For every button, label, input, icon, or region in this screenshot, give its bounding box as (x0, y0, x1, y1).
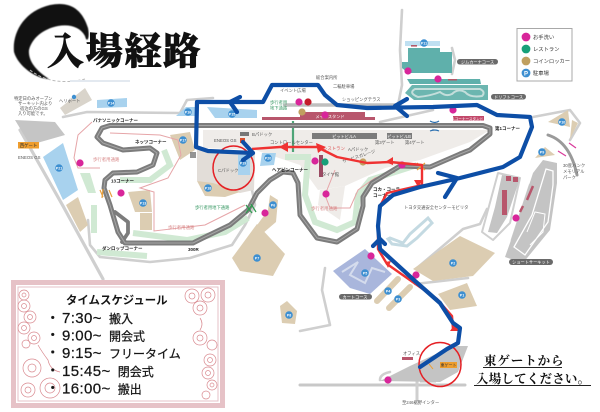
track map labels: パーク (563, 175, 576, 181)
schedule rows: ・ (46, 345, 60, 360)
floral decoration (18, 288, 217, 399)
kart course (333, 249, 392, 300)
west gate area (15, 120, 65, 145)
track map labels: ENEOS GS (214, 138, 237, 143)
track map labels: 第1コーナー (495, 125, 521, 132)
parking marker numbers: P9 (540, 150, 544, 154)
parking marker numbers: P11 (421, 41, 427, 45)
parking marker numbers: P7 (255, 256, 259, 260)
parking marker numbers: P13 (140, 201, 146, 205)
track map labels: 地下通路 (270, 104, 288, 112)
schedule rows: ・ (46, 380, 60, 396)
main stand: メインスタンド (315, 113, 345, 120)
paddock ground (203, 130, 490, 190)
parking marker numbers: P21 (56, 166, 62, 170)
west gate sign (18, 142, 39, 149)
track map labels: コーナー (373, 193, 391, 199)
track map labels: コントロールセンター (270, 139, 313, 146)
track map labels: ENEOS GS (18, 155, 41, 160)
track map labels: 歩行者用地下通路 (195, 204, 230, 211)
main stand (262, 112, 375, 120)
track map labels: 歩行者用 (270, 99, 287, 106)
track map labels: Aパドック (348, 147, 368, 153)
schedule rows: 7:30~ 搬入 (62, 310, 133, 327)
blue route (196, 85, 532, 367)
pit buildings: ピットビルA (332, 133, 356, 139)
parking marker numbers: P14 (108, 101, 114, 105)
track map labels: タイヤ館 (322, 171, 340, 178)
track map labels: オフィス (403, 351, 420, 356)
short circuit and paddock (488, 160, 557, 266)
track map labels: 30度バンク (563, 162, 585, 169)
parking 20 west (43, 143, 78, 200)
schedule panel (11, 280, 225, 408)
title: 入場経路 (47, 21, 202, 75)
parking marker numbers: P2 (451, 261, 455, 265)
track map labels: 第3ゲート (375, 139, 395, 146)
main straight and track (97, 126, 490, 243)
parking marker numbers: P4 (386, 289, 390, 293)
red circle: C paddock (213, 146, 254, 190)
legend: parking (522, 69, 550, 77)
track map labels: ヘリポート (59, 98, 80, 104)
parking marker numbers: P18 (205, 186, 211, 190)
red route (252, 142, 459, 331)
parking marker numbers: P17 (180, 138, 186, 142)
infield green (94, 150, 417, 256)
schedule rows: ・ (46, 328, 60, 342)
kart course: カートコース (343, 294, 367, 300)
schedule rows: 15:45~ 閉会式 (62, 363, 154, 380)
parking marker numbers: P5 (363, 271, 367, 275)
legend: parking: 駐車場 (533, 69, 550, 77)
east gate instruction (474, 351, 591, 387)
track map labels: 宿泊の方のGS (20, 105, 48, 112)
coin locker markers (298, 108, 367, 166)
west gate sign: 西ゲート (20, 142, 37, 149)
schedule rows: ・ (46, 310, 60, 326)
pit buildings: ピットビルB (387, 133, 411, 139)
parking marker numbers: P6 (271, 203, 275, 207)
track map labels: 入り可能です。 (18, 110, 48, 117)
pink restroom markers (76, 67, 520, 384)
corner stand: 1コーナースタンド (453, 116, 484, 121)
brush circle behind title (14, 4, 130, 82)
parking marker numbers: P10 (559, 120, 565, 124)
schedule rows: 9:00~ 開会式 (62, 328, 145, 344)
track map labels: メモリアル (563, 169, 585, 175)
track map labels: 特定日のみオープン (14, 95, 52, 102)
schedule rows: ・ (46, 363, 60, 378)
track map labels: 歩行者用通路 (93, 156, 120, 163)
parking marker numbers: P1 (460, 293, 464, 297)
pedestrian walkways (74, 122, 395, 231)
orange and green crossings (100, 121, 576, 213)
green restaurant markers (304, 98, 329, 166)
legend: parking: P (524, 71, 528, 77)
short circuit and paddock: ショートサーキット (512, 260, 550, 266)
track map labels: 13コーナー (111, 178, 135, 184)
parking marker numbers (56, 41, 565, 317)
schedule heading: タイムスケジュール (66, 294, 168, 307)
schedule rows: 9:15~ フリータイム (62, 345, 181, 362)
track map labels: Cパドック (218, 168, 238, 174)
track map labels: イベント広場 (280, 87, 306, 94)
red circle: east gate (419, 342, 461, 386)
east gate area: 東ゲート (440, 362, 456, 368)
legend: restaurant: レストラン (533, 46, 560, 53)
track map labels: トヨタ交通安全センターモビリタ (404, 204, 468, 211)
track map labels: 至246裾野インター (402, 399, 439, 406)
legend: coin locker: コインロッカー (533, 58, 570, 65)
east gate instruction: 東ゲートから (484, 351, 564, 369)
track map labels: ダンロップコーナー (102, 245, 143, 252)
parking marker numbers: P16 (185, 110, 191, 114)
parking marker numbers: P8 (287, 313, 291, 317)
track map labels: ジムカーナコース (461, 59, 494, 65)
track map labels: 300R (188, 247, 200, 252)
legend (517, 28, 572, 81)
pit buildings (190, 132, 412, 177)
beige lots (60, 88, 578, 324)
schedule rows: 16:00~ 搬出 (62, 380, 142, 398)
track map labels: 二輪駐車場 (333, 83, 355, 90)
traffic safety centre course (388, 218, 432, 246)
schedule rows (46, 310, 181, 398)
track map labels: ショッピングテラス (342, 96, 381, 103)
east gate instruction: 入場してください。 (476, 369, 590, 387)
blue parking markers (55, 39, 566, 319)
light blue parking lots (97, 41, 440, 175)
track map labels: ネッツコーナー (135, 138, 167, 146)
parking marker numbers: P20 (265, 156, 271, 160)
track map labels: 第4ゲート (405, 139, 425, 146)
track map labels: 歩行者用通路 (311, 205, 338, 212)
track map labels: ドリフトコース (494, 94, 523, 99)
east gate area (380, 346, 468, 382)
underpass marker line (292, 121, 294, 152)
parking marker numbers: P15 (229, 112, 235, 116)
parking marker numbers: P3 (396, 297, 400, 301)
track map labels: 総合案内所 (316, 74, 338, 81)
parking marker numbers: P19 (240, 161, 246, 165)
track map labels: パナソニックコーナー (93, 117, 138, 124)
track map labels: Bパドック (252, 132, 272, 138)
gymkhana and drift courses (402, 45, 488, 100)
track map labels: サービスガレージ (341, 147, 377, 165)
track map labels: ヘアピンコーナー (272, 168, 308, 174)
legend: restroom: お手洗い (533, 33, 554, 41)
track map labels: コカ・コーラ (373, 186, 400, 193)
track map labels: レストラン (323, 146, 346, 152)
track map labels: 歩行者用通路 (168, 224, 195, 231)
track map labels: サーキット内より (18, 100, 52, 107)
